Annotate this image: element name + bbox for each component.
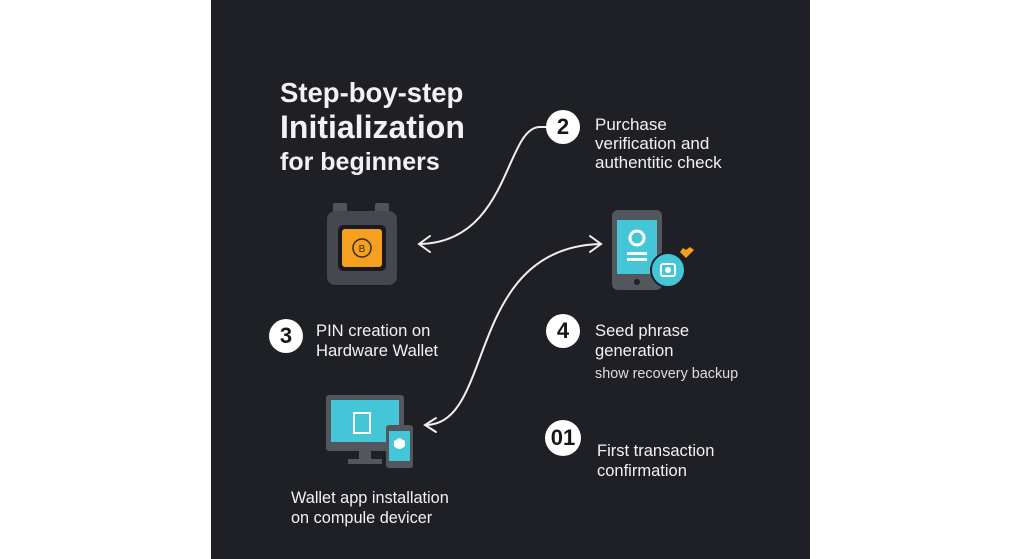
step 01 <box>545 420 714 480</box>
text: Seed phrase <box>595 321 689 340</box>
text: show recovery backup <box>595 366 738 382</box>
text: 2 <box>557 114 569 139</box>
step 4 <box>546 314 738 382</box>
text: authentitic check <box>595 153 722 172</box>
title: Initialization <box>280 109 465 145</box>
text: 01 <box>551 425 575 450</box>
step 2 <box>546 110 722 172</box>
step 1 label: on compule devicer <box>291 509 432 527</box>
text: verification and <box>595 134 709 153</box>
text: 3 <box>280 323 292 348</box>
title: for beginners <box>280 148 440 176</box>
title: Step-boy-step <box>280 77 463 108</box>
text: Purchase <box>595 115 667 134</box>
text: Hardware Wallet <box>316 341 438 360</box>
panel: dark background <box>211 0 810 559</box>
icon: hardware wallet: B <box>359 244 366 255</box>
step 1 label <box>291 489 449 527</box>
icon: computer and phone <box>326 395 413 468</box>
text: 4 <box>557 318 569 343</box>
step 1 label: Wallet app installation <box>291 489 449 507</box>
text: confirmation <box>597 462 687 480</box>
icon: phone with seed <box>612 210 694 290</box>
step 3 <box>269 319 438 360</box>
text: generation <box>595 341 673 360</box>
text: First transaction <box>597 442 714 460</box>
text: PIN creation on <box>316 321 430 340</box>
icon: hardware wallet <box>327 203 397 285</box>
title <box>280 77 465 176</box>
